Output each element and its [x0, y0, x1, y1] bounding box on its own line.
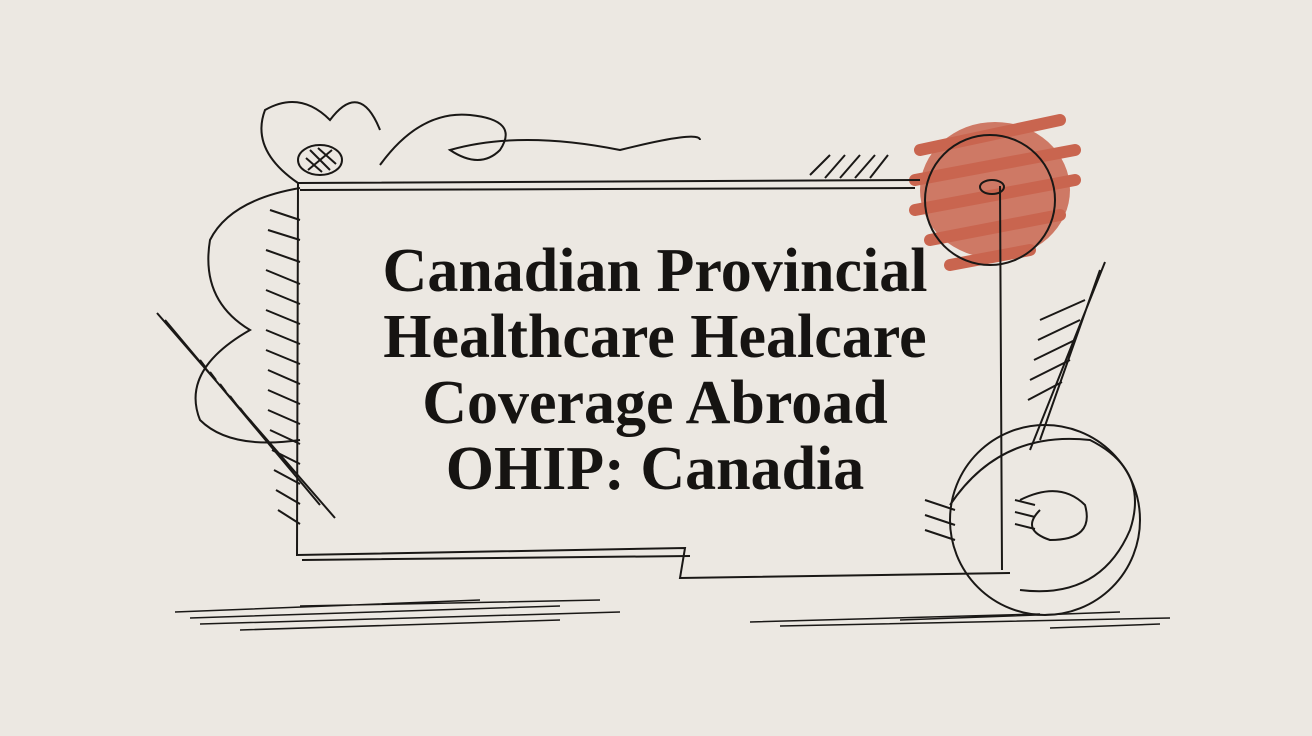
- main frame: [157, 102, 1140, 615]
- red scribble blob: [915, 120, 1075, 265]
- title: Healthcare Healcare: [383, 303, 927, 371]
- title: Canadian Provincial: [383, 237, 927, 305]
- ground lines: [175, 600, 1170, 630]
- title: OHIP: Canadia: [446, 435, 864, 503]
- title: Coverage Abroad: [422, 369, 888, 437]
- title: [383, 237, 927, 503]
